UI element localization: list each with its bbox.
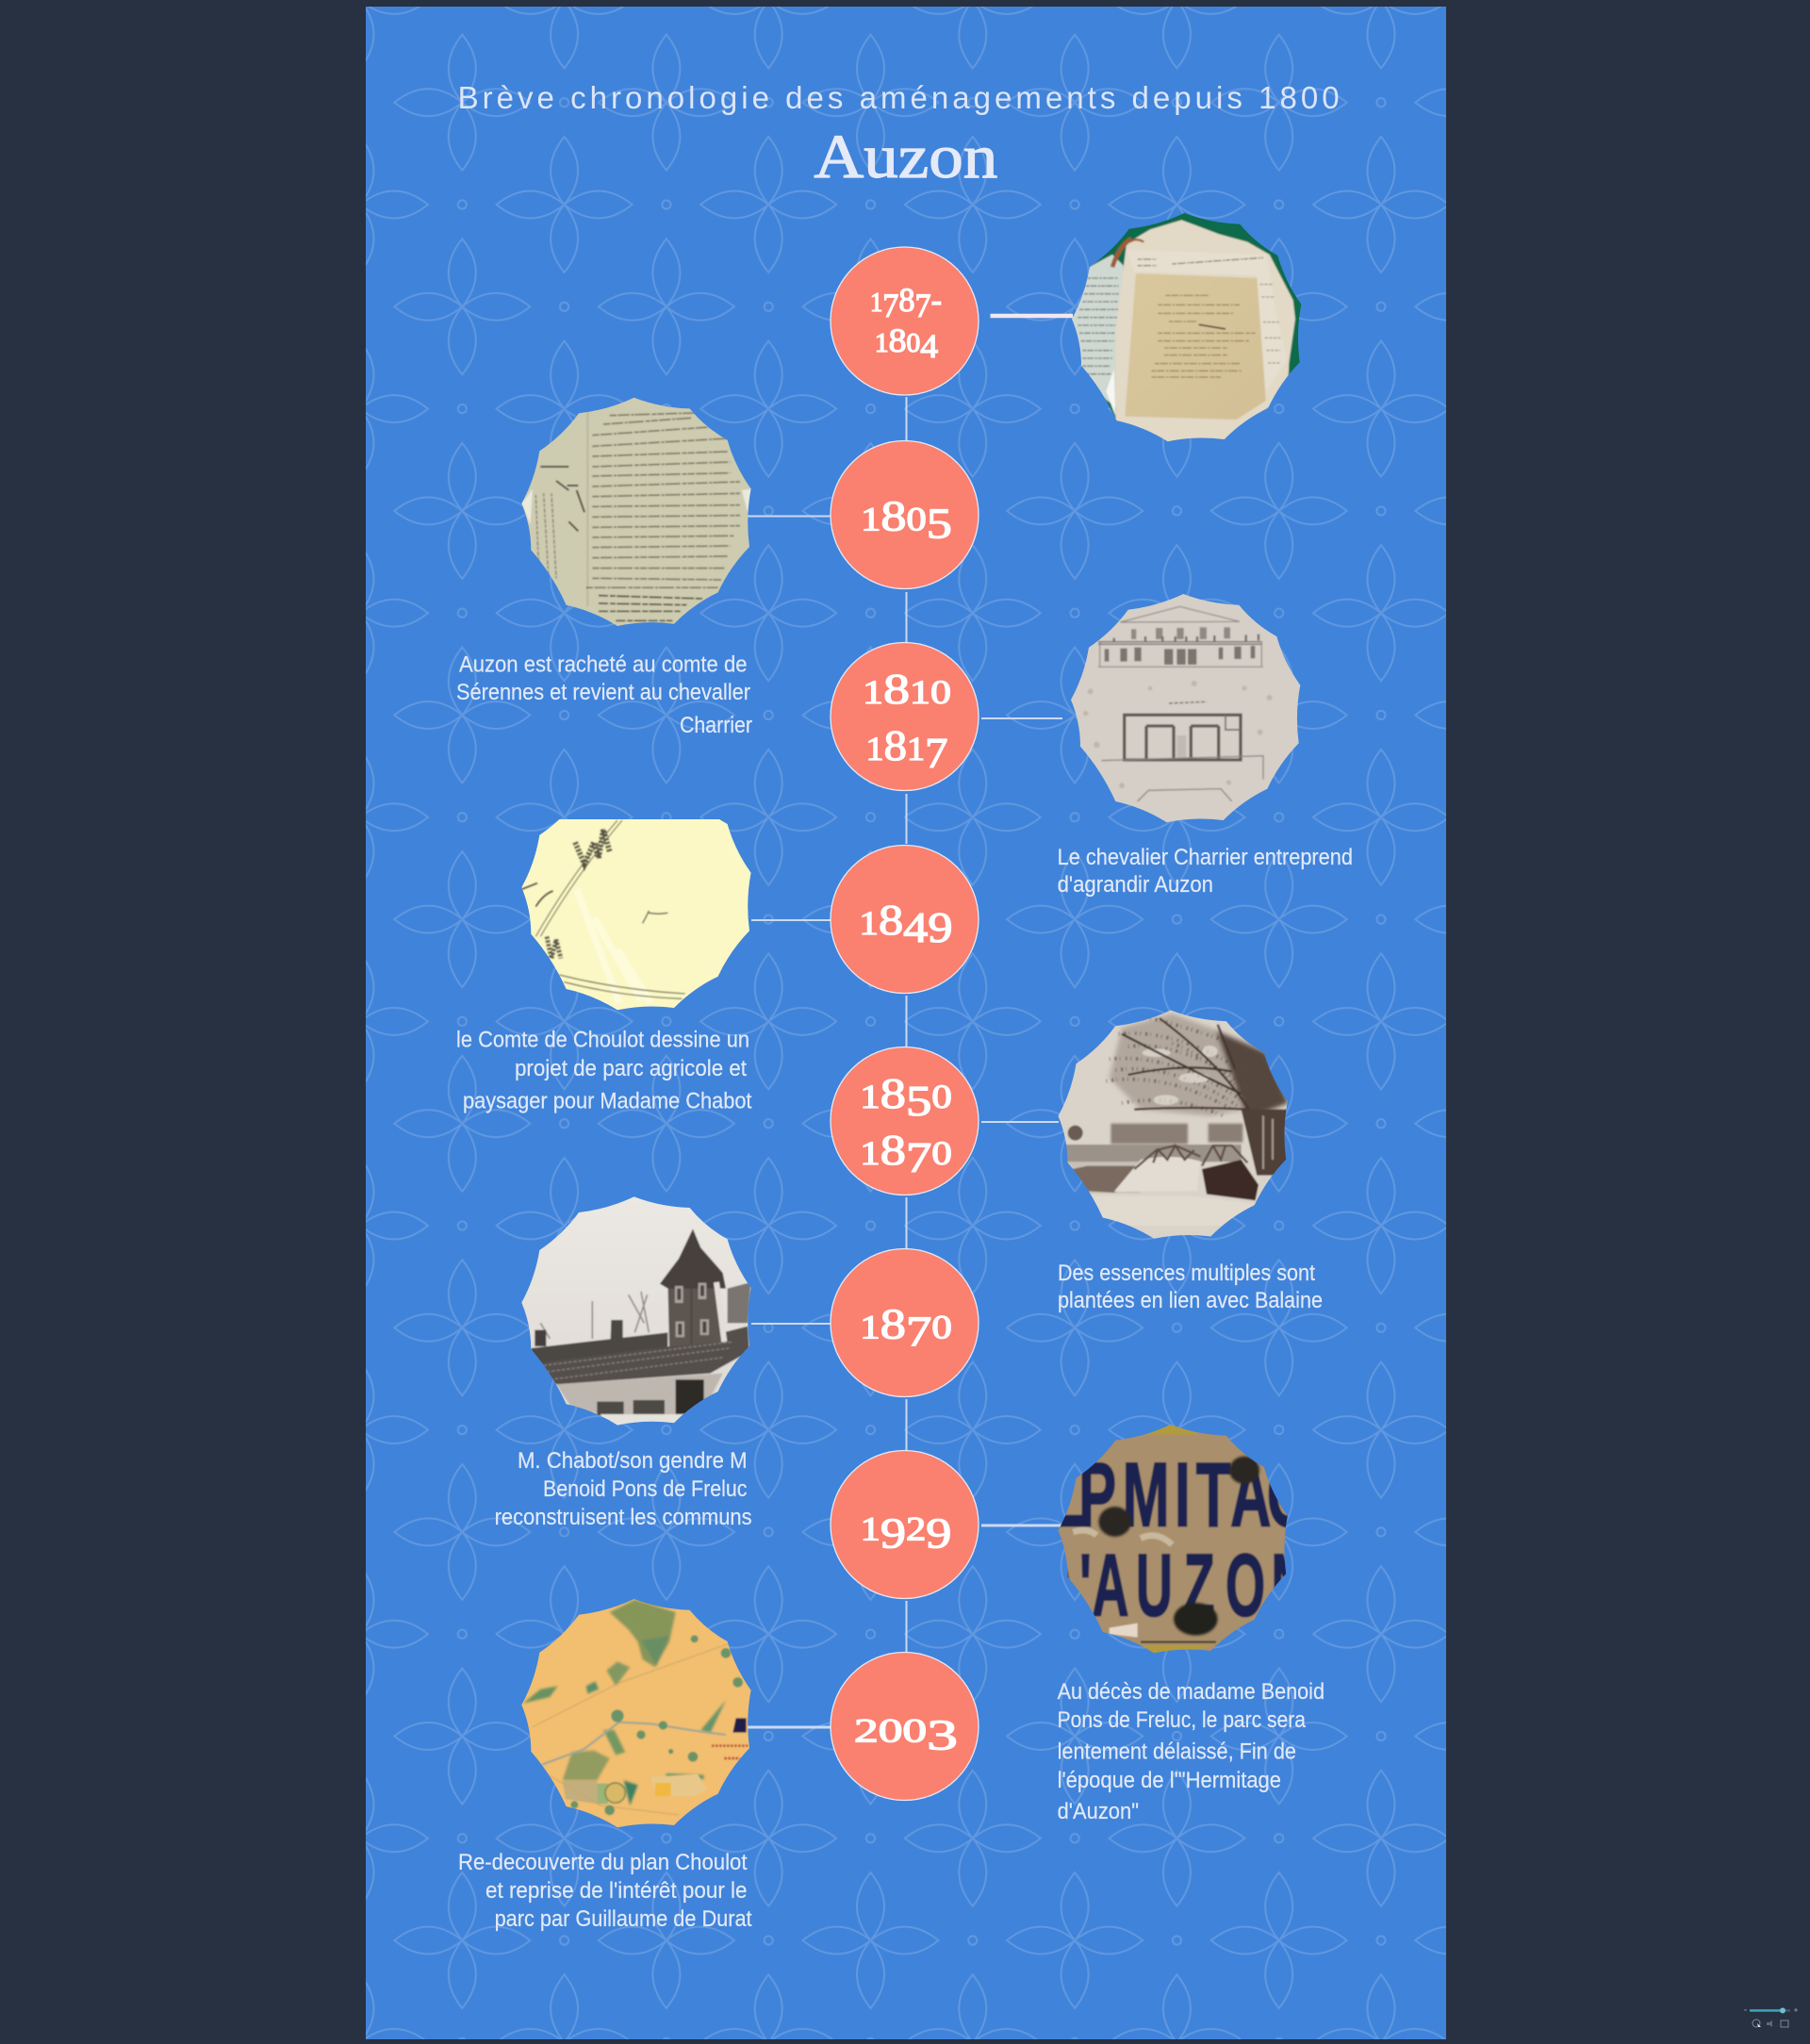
text block: 1850-1870: Des essences multiples sont	[1058, 1261, 1315, 1286]
year marker 1805	[831, 441, 979, 588]
year marker 1849	[831, 845, 979, 994]
panel: blue patterned background	[366, 7, 1446, 2039]
year marker 1810 1817: 181	[866, 722, 925, 770]
title: Auzon	[814, 123, 997, 191]
text block: 1929	[1058, 1679, 1325, 1824]
year marker 1850 1870	[831, 1047, 979, 1195]
photo: enamel sign Hermitage d'Auzon 1929	[1058, 1425, 1288, 1654]
text block: 2003: parc par Guillaume de Durat	[495, 1906, 752, 1932]
text block: 1870: reconstruisent les communs	[495, 1505, 752, 1530]
year marker 2003: 200	[854, 1711, 927, 1750]
text block: 1929: lentement délaissé, Fin de	[1058, 1739, 1296, 1765]
year marker 1787-1804: 1	[870, 288, 882, 317]
year marker 1929: 1	[861, 1509, 880, 1548]
year marker 1787-1804: 8	[898, 281, 915, 319]
photo: Choulot coloured park plan 2003	[521, 1599, 751, 1827]
year marker 1810 1817: 7	[925, 730, 947, 778]
text block: 1929: d'Auzon"	[1058, 1799, 1139, 1824]
text block: 1849: le Comte de Choulot dessine un	[456, 1028, 749, 1053]
photo: Choulot park sketch 1849	[522, 819, 751, 1011]
year marker 1929: 9	[926, 1508, 951, 1558]
text block: 1929: Pons de Freluc, le parc sera	[1058, 1707, 1307, 1733]
year marker 2003	[831, 1652, 979, 1801]
photo: enamel sign Hermitage d'Auzon 1929: D'AUZON	[1034, 1537, 1308, 1635]
photo: architect plan of the house 1810-1817	[1071, 594, 1301, 822]
year marker 1787-1804: 4	[920, 327, 938, 365]
year marker 1929	[831, 1450, 979, 1599]
year marker 1787-1804: 7	[915, 287, 931, 324]
year marker 1805: 180	[861, 491, 927, 540]
text block: 1870	[495, 1448, 752, 1530]
text block: 1870: Benoid Pons de Freluc	[543, 1476, 747, 1502]
text block: 1849: paysager pour Madame Chabot	[463, 1089, 752, 1114]
photo: archive documents 1787-1804	[1072, 213, 1301, 441]
zoom control widget	[1744, 2008, 1798, 2027]
year marker 1805: 5	[927, 499, 952, 548]
text block: 1805	[456, 652, 752, 738]
year marker 1787-1804: 180	[875, 321, 920, 359]
text block: 1929: Au décès de madame Benoid	[1058, 1679, 1325, 1705]
text block: 2003: et reprise de l'intérêt pour le	[485, 1878, 747, 1904]
year marker 1787-1804	[831, 247, 979, 395]
year marker 1787-1804: -	[931, 281, 942, 319]
year marker 1850 1870: 18	[860, 1069, 906, 1117]
text block: 2003: Re-decouverte du plan Choulot	[458, 1850, 748, 1875]
text block: 1849: projet de parc agricole et	[515, 1056, 747, 1081]
text block: 1810-1817	[1058, 845, 1353, 898]
photo: handwritten deed 1805	[521, 398, 751, 626]
photo: rustic bridge and tree 1850-1870	[1058, 1011, 1288, 1239]
text block: 1810-1817: d'agrandir Auzon	[1058, 872, 1213, 898]
text block: 1929: l'époque de l'"Hermitage	[1058, 1768, 1281, 1793]
photo: rebuilt outbuildings 1870	[521, 1196, 751, 1426]
year marker 1850 1870: 0	[931, 1134, 952, 1172]
year marker 1850 1870: 5	[906, 1077, 931, 1125]
text block: 1850-1870: plantées en lien avec Balaine	[1058, 1288, 1323, 1313]
text block: 1850-1870	[1058, 1261, 1323, 1313]
year marker 1870	[831, 1248, 979, 1397]
year marker 1850 1870: 18	[860, 1126, 906, 1174]
year marker 1870: 0	[931, 1309, 952, 1346]
year marker 1850 1870: 0	[931, 1078, 952, 1115]
timeline connector lines	[746, 316, 1073, 1727]
year marker 2003: 3	[927, 1711, 958, 1759]
photo: enamel sign Hermitage d'Auzon 1929: LPMITAC	[1051, 1444, 1308, 1546]
text block: 1805: Sérennes et revient au chevaller	[456, 680, 750, 705]
text block: 1805: Auzon est racheté au comte de	[459, 652, 747, 677]
year marker 1870: 18	[860, 1300, 906, 1348]
year marker 1929: 2	[906, 1509, 926, 1548]
year marker 1810 1817: 1810	[863, 666, 951, 714]
text block: 1805: Charrier	[680, 713, 752, 738]
year marker 1870: 7	[906, 1308, 931, 1356]
text block: 1870: M. Chabot/son gendre M	[518, 1448, 747, 1474]
text block: 1810-1817: Le chevalier Charrier entreprend	[1058, 845, 1353, 870]
year marker 1849: 18	[859, 896, 903, 944]
year marker 1929: 9	[880, 1508, 906, 1558]
year marker 1787-1804: 7	[882, 287, 898, 324]
year marker 1850 1870: 7	[906, 1133, 931, 1181]
year marker 1849: 49	[903, 903, 953, 951]
text block: 2003	[458, 1850, 752, 1932]
subtitle: Brève chronologie des aménagements depuis 1800	[458, 80, 1340, 115]
year marker 1810 1817	[831, 643, 979, 790]
text block: 1849	[456, 1028, 752, 1114]
